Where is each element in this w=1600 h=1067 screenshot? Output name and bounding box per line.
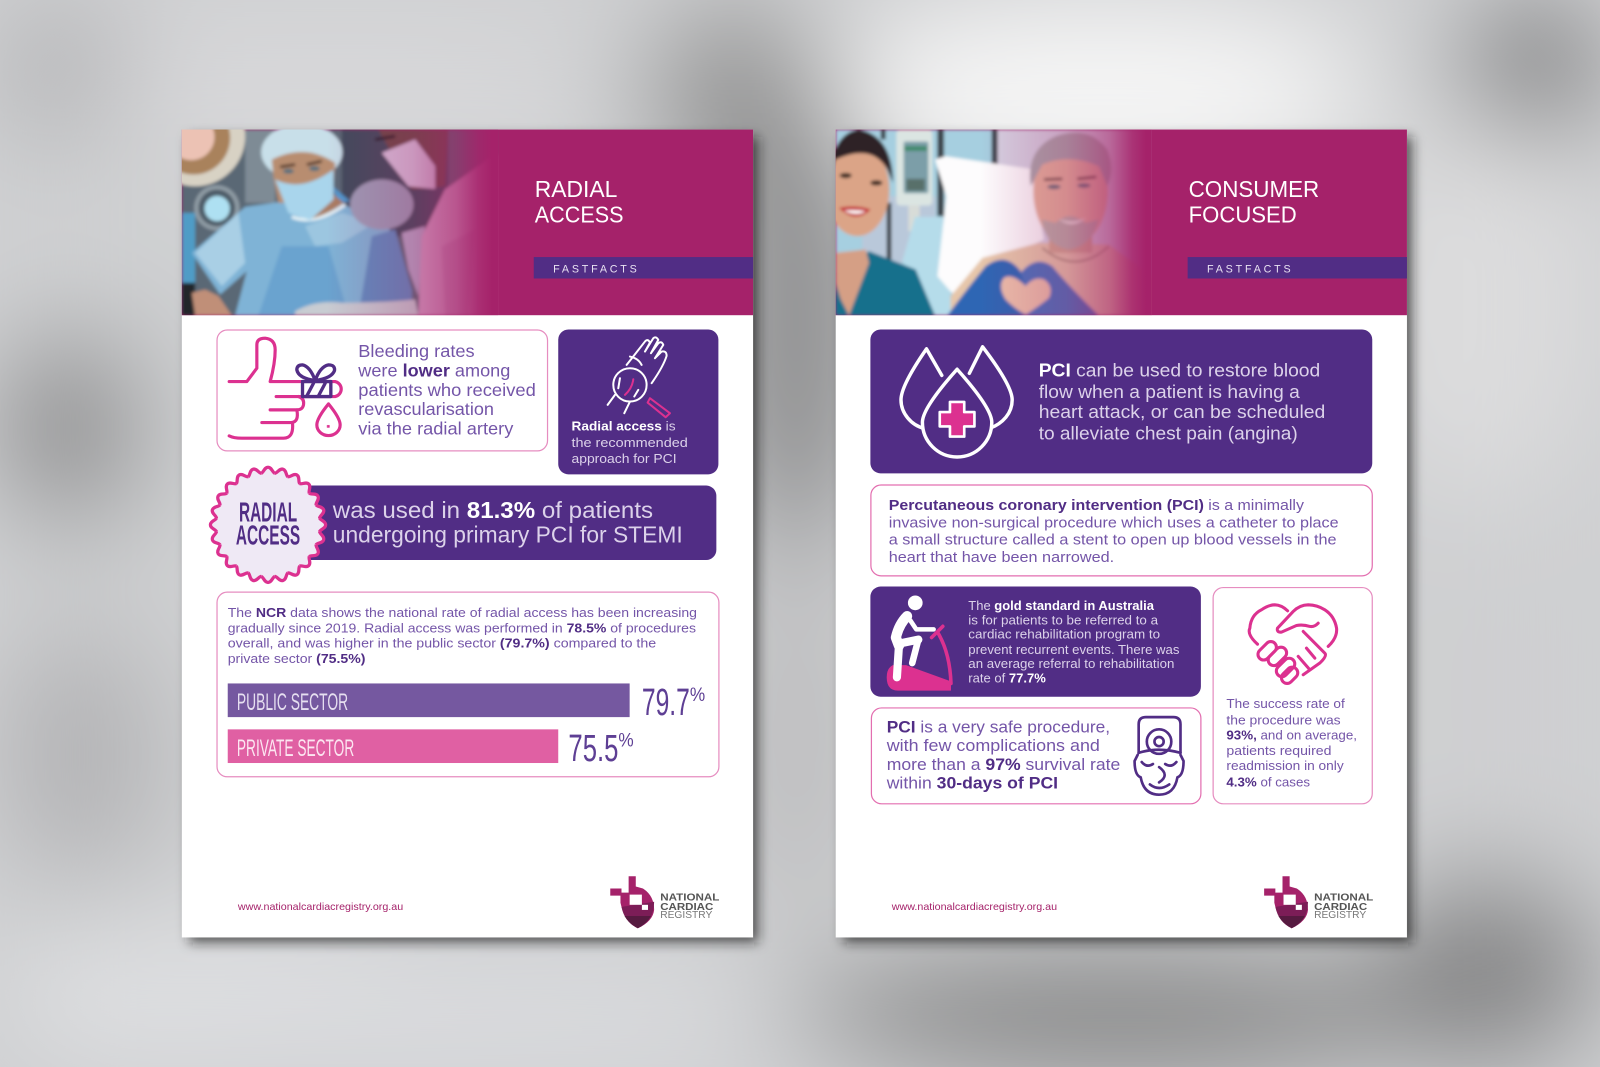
icon: three blood drops with medical cross — [901, 347, 1012, 457]
logo: National Cardiac Registry: REGISTRY — [660, 910, 712, 921]
footer url: www.nationalcardiacregistry.org.au — [237, 902, 403, 913]
icon: doctor face with head mirror — [1135, 717, 1184, 795]
text: NCR data: The NCR data shows the national rate of radial access has been increasing — [228, 605, 697, 620]
text: safety: PCI is a very safe procedure, — [887, 717, 1110, 736]
text: NCR data: overall, and was higher in the public sector (79.7%) compared to the — [228, 636, 656, 651]
text: success rate: the procedure was — [1226, 712, 1341, 727]
panel: PCI definition: Percutaneous coronary intervention (PCI) is a minimally — [889, 498, 1305, 514]
bar: private sector 75.5%: 75.5 — [568, 727, 618, 769]
fastfacts strip: FASTFACTS — [553, 263, 637, 275]
logo: National Cardiac Registry: NATIONAL — [660, 893, 719, 904]
text: recommended approach: the recommended — [572, 435, 688, 450]
text: bleeding rates: via the radial artery — [358, 419, 514, 439]
text: what PCI does — [1039, 359, 1325, 444]
text: NCR data — [228, 605, 697, 666]
header: magenta band — [182, 130, 753, 315]
logo: National Cardiac Registry: CARDIAC — [1314, 902, 1368, 913]
panel: what PCI does — [870, 329, 1372, 473]
icon: person on exercise bike — [887, 596, 951, 691]
panel: PCI definition: heart that have been narrowed. — [889, 550, 1114, 566]
logo: National Cardiac Registry: REGISTRY — [1314, 910, 1366, 921]
text: bleeding rates: Bleeding rates — [358, 341, 475, 361]
bar: public sector 79.7%: PUBLIC SECTOR — [237, 689, 348, 716]
text: gold standard: cardiac rehabilitation program to — [968, 627, 1160, 642]
text: NCR data: private sector (75.5%) — [228, 651, 365, 666]
fastfacts strip — [534, 257, 753, 278]
text: success rate — [1226, 696, 1357, 789]
fastfacts strip: FASTFACTS — [1207, 263, 1291, 275]
header: magenta band — [836, 130, 1407, 315]
panel: radial access recommended — [558, 329, 718, 474]
panel: consumer focused sheet — [825, 130, 1407, 937]
bar: public sector 79.7%: 79.7 — [642, 681, 690, 723]
text: recommended approach — [572, 418, 688, 466]
text: gold standard: rate of 77.7% — [968, 670, 1046, 685]
panel: 81.3% stat banner — [296, 486, 716, 560]
bar: private sector 75.5%: % — [618, 730, 634, 752]
text: gold standard: prevent recurrent events. There was — [968, 642, 1179, 657]
title — [535, 176, 624, 227]
bar: public sector 79.7% — [228, 681, 705, 723]
text: stat: was used in 81.3% of patients — [332, 497, 653, 523]
text: safety: more than a 97% survival rate — [887, 755, 1120, 774]
panel: gold standard rehabilitation — [870, 587, 1201, 697]
title: ACCESS — [535, 201, 624, 227]
bar: private sector 75.5%: PRIVATE SECTOR — [237, 735, 354, 762]
text: bleeding rates — [357, 341, 536, 439]
text: bleeding rates: revascularisation — [358, 399, 494, 419]
text: what PCI does: heart attack, or can be scheduled — [1039, 401, 1325, 422]
title: FOCUSED — [1189, 201, 1297, 227]
panel: success rate — [1213, 588, 1372, 804]
panel: bleeding rates — [217, 330, 548, 451]
logo: National Cardiac Registry — [610, 876, 719, 928]
page shadows — [189, 137, 1412, 943]
panel: NCR data with sector bars — [217, 592, 719, 777]
badge: radial access seal: ACCESS — [236, 520, 300, 551]
photo: surgeons in operating theatre — [182, 130, 498, 316]
text: success rate: 4.3% of cases — [1226, 774, 1310, 789]
icon: thumbs up with bow and blood drop — [229, 338, 341, 438]
panel: PCI definition — [871, 485, 1372, 576]
badge: radial access seal: RADIAL — [239, 496, 297, 527]
fastfacts strip — [1188, 257, 1407, 278]
text: safety — [886, 717, 1120, 793]
text: NCR data: gradually since 2019. Radial access was performed in 78.5% of procedures — [228, 620, 696, 635]
text: bleeding rates: patients who received — [358, 380, 536, 400]
text: recommended approach: Radial access is — [572, 418, 676, 433]
text: stat: undergoing primary PCI for STEMI — [333, 522, 683, 548]
bar: private sector 75.5% — [228, 727, 634, 769]
text: what PCI does: flow when a patient is having a — [1039, 381, 1300, 402]
panel: PCI definition: invasive non-surgical procedure which uses a catheter to place — [889, 515, 1339, 531]
text: what PCI does: PCI can be used to restore blood — [1039, 359, 1320, 380]
panel: PCI definition: a small structure called a stent to open up blood vessels in the — [889, 533, 1337, 549]
logo: National Cardiac Registry: NATIONAL — [1314, 893, 1373, 904]
footer url: www.nationalcardiacregistry.org.au — [891, 902, 1057, 913]
text: what PCI does: to alleviate chest pain (angina) — [1039, 423, 1298, 444]
text: safety: with few complications and — [886, 736, 1100, 755]
badge: radial access seal — [210, 467, 326, 582]
bar: public sector 79.7%: % — [690, 684, 705, 706]
title: RADIAL — [535, 176, 617, 202]
text: success rate: readmission in only — [1226, 758, 1344, 773]
text: success rate: The success rate of — [1226, 696, 1345, 711]
photo: nurse and patient making heart gesture — [825, 130, 1169, 316]
text: bleeding rates: were lower among — [357, 360, 510, 380]
logo: National Cardiac Registry — [1264, 876, 1373, 928]
panel: PCI safety — [871, 708, 1201, 804]
logo: National Cardiac Registry: CARDIAC — [660, 902, 714, 913]
title — [1189, 176, 1319, 227]
text: recommended approach: approach for PCI — [572, 451, 677, 466]
title: CONSUMER — [1189, 176, 1319, 202]
icon: handshake heart — [1249, 605, 1337, 686]
text: gold standard — [968, 598, 1179, 685]
text: safety: within 30-days of PCI — [886, 774, 1058, 793]
text: stat — [332, 497, 683, 548]
icon: hand and magnifying glass — [608, 337, 670, 417]
text: success rate: patients required — [1226, 743, 1331, 758]
text: gold standard: The gold standard in Australia — [968, 598, 1155, 613]
text: gold standard: is for patients to be referred to a — [968, 612, 1159, 627]
text: gold standard: an average referral to rehabilitation — [968, 656, 1174, 671]
panel: radial access sheet — [182, 130, 754, 938]
text: success rate: 93%, and on average, — [1226, 728, 1357, 743]
